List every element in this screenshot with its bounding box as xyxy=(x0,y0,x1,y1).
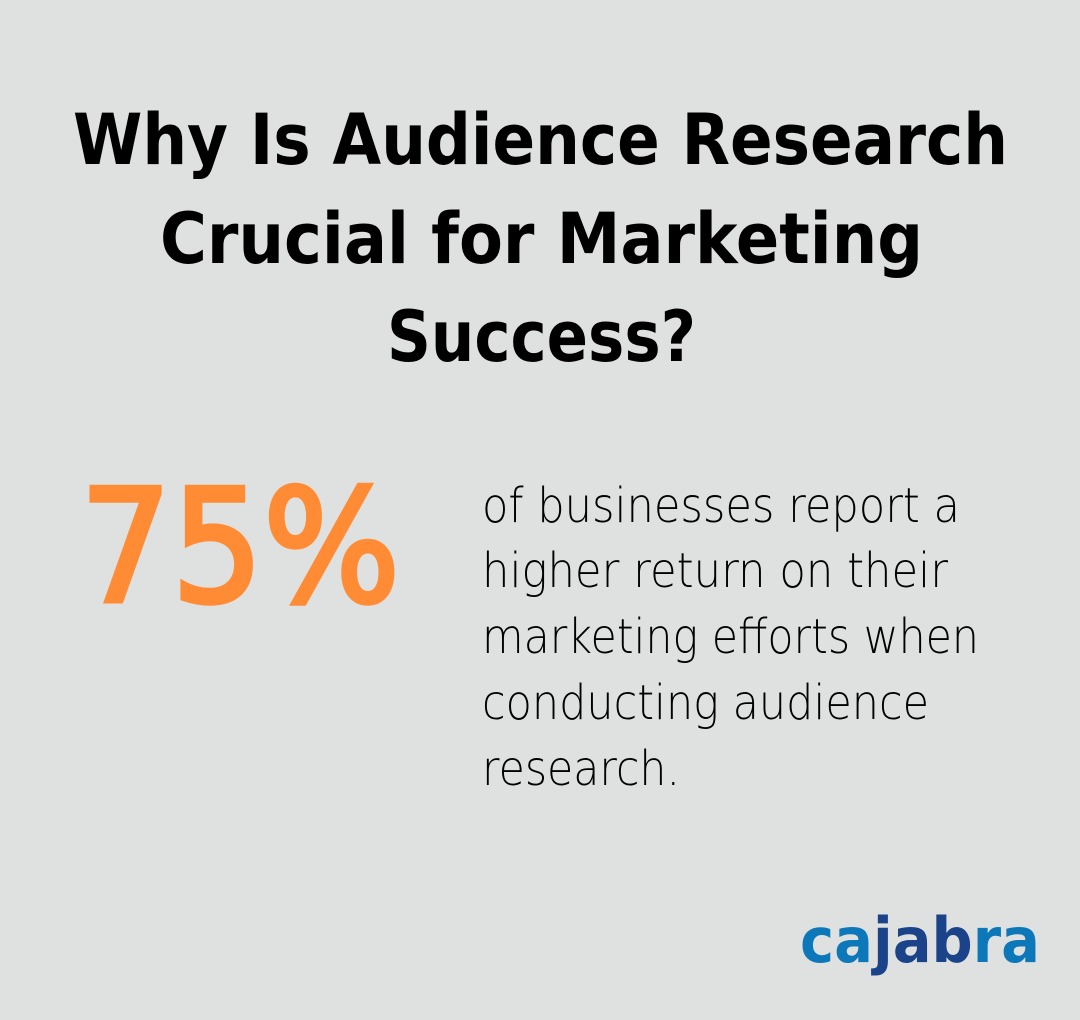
title xyxy=(73,99,1008,378)
description text: conducting audience xyxy=(482,675,929,731)
title: Success? xyxy=(387,296,696,378)
title: Crucial for Marketing xyxy=(160,198,923,280)
statistic: 75%: 75% xyxy=(80,456,400,638)
description text: research. xyxy=(482,741,680,797)
description text: higher return on their xyxy=(482,543,948,599)
description text: marketing efforts when xyxy=(482,609,979,665)
logo: cajabra: cajabra xyxy=(800,904,1040,977)
description text: of businesses report a xyxy=(482,478,960,534)
description text xyxy=(482,478,979,797)
